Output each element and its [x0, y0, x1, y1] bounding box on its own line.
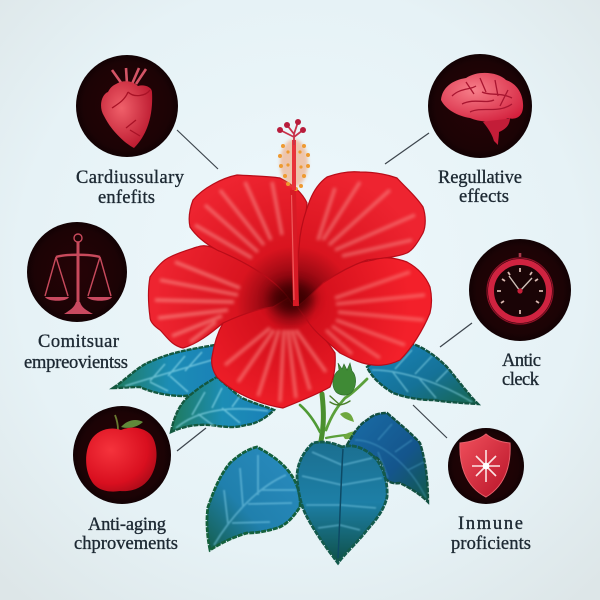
main stem: [300, 379, 367, 441]
label: Cardiussulary: [76, 168, 185, 188]
flower: [148, 119, 432, 408]
leaves behind flower: [113, 344, 478, 432]
stigma: [277, 119, 306, 145]
petal: top left: [189, 175, 307, 305]
item: scales: [24, 222, 128, 373]
connector lines: [177, 130, 472, 451]
icon: apple: [73, 406, 171, 504]
petal: right: [296, 258, 432, 365]
label: cleck: [502, 370, 540, 390]
label: Inmune: [458, 514, 523, 534]
label: [76, 168, 185, 208]
stems and bud: [300, 363, 367, 441]
hibiscus plant: [113, 119, 478, 563]
label: [438, 168, 522, 207]
label: Comitsuar: [38, 332, 119, 352]
label: enfefits: [98, 188, 155, 208]
icon: heart: [76, 55, 178, 157]
item: brain: [428, 54, 532, 207]
pollen cluster: [278, 139, 310, 191]
label: empreovientss: [24, 353, 128, 373]
leaf: middle left: [171, 377, 274, 432]
icon: balance scales: [27, 222, 127, 322]
label: effects: [459, 187, 509, 207]
icon: brain: [428, 54, 532, 158]
label: proficients: [451, 534, 531, 554]
item: immune: [448, 428, 531, 554]
leaf: center: [297, 442, 387, 563]
leaf: upper left: [113, 345, 225, 396]
petal: left: [148, 245, 298, 348]
stamen column: [277, 119, 310, 306]
icon: shield: [448, 428, 524, 504]
petal: bottom: [212, 293, 335, 408]
label: chprovements: [74, 534, 178, 554]
item: clock: [469, 239, 571, 390]
small leaflets: [340, 412, 354, 422]
label: [451, 514, 531, 554]
petal: top right: [297, 172, 425, 306]
label: Anti-aging: [88, 515, 166, 535]
leaf: upper right: [367, 344, 478, 404]
label: [24, 332, 128, 373]
flower throat: [270, 283, 314, 313]
label: [502, 351, 541, 390]
label: Regullative: [438, 168, 522, 188]
bud: [333, 363, 356, 395]
item: cardiovascular: [76, 55, 185, 208]
label: [74, 515, 178, 554]
leaf: lower right: [347, 413, 428, 502]
leaves below flower: [207, 413, 428, 563]
item: apple: [73, 406, 178, 554]
label: Antic: [502, 351, 541, 371]
leaf: lower left: [207, 447, 300, 550]
icon: clock: [469, 239, 571, 341]
